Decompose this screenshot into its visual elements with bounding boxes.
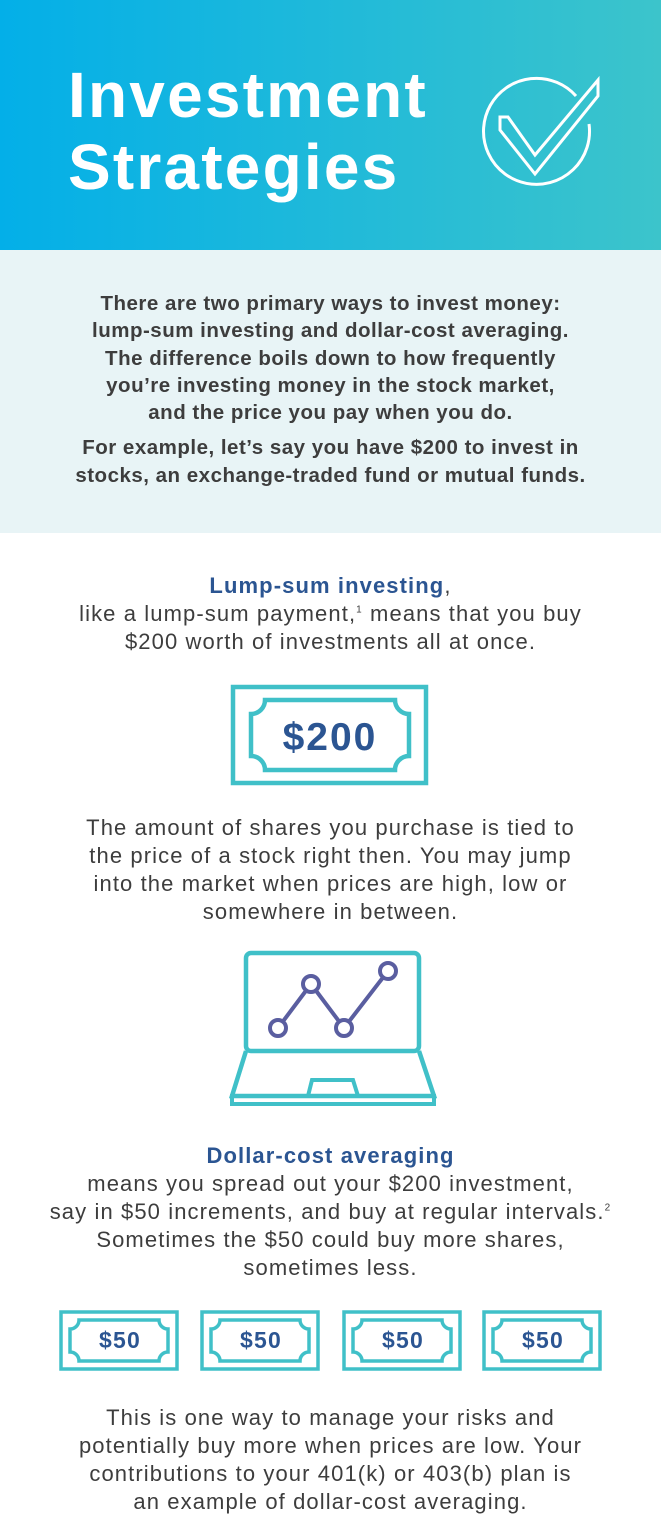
icons: $50 banknotes: $50 <box>240 1327 282 1353</box>
closing text: contributions to your 401(k) or 403(b) plan is <box>89 1461 572 1486</box>
closing text: This is one way to manage your risks and <box>106 1405 555 1430</box>
icons: $50 banknotes <box>59 1310 602 1371</box>
lump-sum text: like a lump-sum payment,1 means that you buy <box>79 601 582 626</box>
lump-sum text <box>79 573 582 654</box>
icon: checkmark <box>482 76 600 186</box>
icon: $200 banknote <box>230 684 428 786</box>
lump-sum text: $200 worth of investments all at once. <box>125 629 536 654</box>
icon: $200 banknote: $200 <box>283 716 377 759</box>
icons: $50 banknotes: $50 <box>382 1327 424 1353</box>
lump-sum text: Lump-sum investing, <box>209 573 452 598</box>
intro text <box>92 292 569 424</box>
icons: $50 banknotes: $50 <box>522 1327 564 1353</box>
title: Strategies <box>68 131 399 203</box>
title: Investment <box>68 59 428 131</box>
icon: laptop chart <box>229 950 438 1106</box>
dollar-cost text: sometimes less. <box>243 1255 418 1280</box>
intro text: There are two primary ways to invest money: <box>100 292 561 315</box>
title <box>68 59 428 203</box>
intro text: you’re investing money in the stock market, <box>106 374 555 397</box>
closing text: potentially buy more when prices are low. Your <box>79 1433 582 1458</box>
example text: stocks, an exchange-traded fund or mutual funds. <box>75 464 586 487</box>
closing text <box>79 1405 582 1514</box>
shares text: somewhere in between. <box>203 899 458 924</box>
example text <box>75 436 586 487</box>
intro text: The difference boils down to how frequently <box>105 347 556 370</box>
dollar-cost text: means you spread out your $200 investment, <box>87 1171 574 1196</box>
shares text: into the market when prices are high, low or <box>94 871 567 896</box>
intro panel <box>0 250 661 533</box>
shares text: the price of a stock right then. You may jump <box>89 843 572 868</box>
shares text: The amount of shares you purchase is tied to <box>86 815 575 840</box>
intro text: lump-sum investing and dollar-cost averaging. <box>92 319 569 342</box>
dollar-cost text: say in $50 increments, and buy at regular intervals.2 <box>50 1199 611 1224</box>
icons: $50 banknotes: $50 <box>99 1327 141 1353</box>
example text: For example, let’s say you have $200 to invest in <box>82 436 579 459</box>
header <box>0 0 661 250</box>
dollar-cost text: Sometimes the $50 could buy more shares, <box>96 1227 565 1252</box>
closing text: an example of dollar-cost averaging. <box>133 1489 528 1514</box>
dollar-cost text: Dollar-cost averaging <box>206 1143 455 1168</box>
shares text <box>86 815 575 924</box>
dollar-cost text <box>50 1143 611 1280</box>
intro text: and the price you pay when you do. <box>148 401 513 424</box>
